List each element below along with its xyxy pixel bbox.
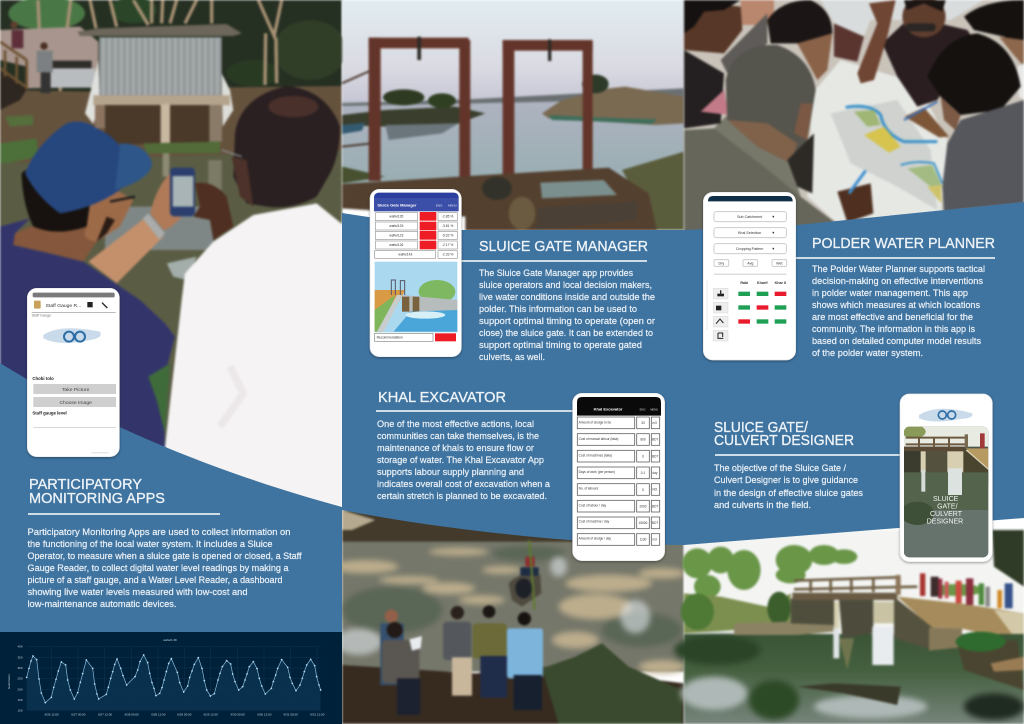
- text: khal excavator description: certain stretch is planned to be excavated.: [377, 491, 547, 502]
- heading: khal excavator: KHAL EXCAVATOR: [378, 390, 506, 406]
- phone: polder water planner: Dry: [718, 261, 724, 265]
- text: sluice gate manager description: support optimal timing to operate (open or: [479, 316, 656, 327]
- text: sluice gate manager description: The Sluice Gate Manager app provides: [479, 268, 633, 279]
- text: polder water planner description: [812, 264, 985, 359]
- phone: khal excavator: day: [652, 471, 658, 475]
- phone: staff gauge reader: Chobi tolo: [32, 376, 54, 381]
- text: sluice gate manager description: support optimal timing to operate gated: [479, 340, 642, 351]
- heading: participatory monitoring apps: PARTICIPATORY: [29, 477, 142, 493]
- phone: polder water planner: Kharif: [757, 281, 768, 285]
- phone: staff gauge reader: Take Picture: [62, 387, 90, 393]
- heading: polder water planner: POLDER WATER PLANNER: [812, 236, 995, 252]
- phone: sluice gate manager: wafw/126: [389, 243, 404, 247]
- phone: khal excavator: Cost of labour / day: [579, 503, 606, 507]
- phone: khal excavator: BDT: [652, 504, 658, 508]
- phone: khal excavator: Amount of sludge / day: [579, 536, 611, 540]
- panel: sluice gate / culvert designer: [714, 420, 901, 511]
- text: polder water planner description: of the polder water system.: [812, 348, 923, 359]
- panel: sluice gate manager: [460, 239, 656, 363]
- text: splash title: GATE/: [937, 503, 958, 510]
- text: polder water planner description: based on detailed computer model results: [812, 336, 981, 347]
- phone: polder water planner: Avg: [747, 261, 753, 265]
- chart: water level dashboard: 300: [18, 666, 23, 670]
- text: participatory monitoring description: Participatory Monitoring Apps are used to collect information on: [28, 527, 290, 538]
- people: [380, 623, 404, 685]
- text: participatory monitoring description: [28, 527, 302, 610]
- phone: sluice gate culvert designer: [900, 394, 992, 562]
- text: khal excavator description: communities can take themselves, is the: [377, 431, 539, 442]
- phone: khal excavator: 0.1: [641, 471, 645, 475]
- text: designer description: Culvert Designer is to give guidance: [714, 475, 858, 486]
- chart: water level dashboard: 6/28 12:00: [151, 713, 166, 717]
- phone: khal excavator: 2000: [639, 504, 647, 508]
- phone: polder water planner: Rabi: [740, 281, 748, 285]
- text: splash title: DESIGNER: [927, 519, 963, 526]
- phone: khal excavator: [573, 393, 665, 561]
- text: sluice gate manager description: close) the sluice gate. It can be extended to: [479, 328, 653, 339]
- text: sluice gate manager description: live water conditions inside and outside the: [479, 292, 655, 303]
- phone: khal excavator: 1130: [640, 538, 647, 542]
- text: polder water planner description: in polder water management. This app: [812, 288, 968, 299]
- photo: two men checking phone by the hut: [0, 0, 347, 533]
- phone: sluice gate manager: MENU: [448, 203, 457, 207]
- text: designer description: in the design of effective sluice gates: [714, 488, 863, 499]
- chart: water level dashboard: 6/29 12:00: [204, 713, 218, 717]
- chart: water level dashboard: 6/27 00:00: [71, 713, 86, 717]
- phone: polder water planner: Cropping Pattern: [736, 247, 763, 251]
- chart: water level dashboard: 150: [18, 698, 23, 702]
- text: splash title: SLUICE: [933, 496, 959, 503]
- phone: polder water planner: ▼: [772, 215, 775, 219]
- phone: sluice gate manager: -2.85 %: [442, 215, 453, 219]
- chart: water level dashboard: 400: [18, 645, 23, 649]
- phone: khal excavator: ENG: [640, 407, 645, 411]
- phone: staff gauge reader: Staff gauge level: [32, 410, 67, 415]
- phone: staff gauge reader: Choose Image: [59, 400, 92, 406]
- phone: khal excavator: Khal Excavator: [594, 406, 623, 411]
- chart: water level dashboard: 250: [18, 677, 23, 681]
- phone: khal excavator: BDT: [652, 454, 658, 458]
- photo: group reading a map at a table: [684, 0, 1024, 233]
- icon: project logo: [43, 328, 101, 343]
- phone: staff gauge reader: Staff Gauge R...: [46, 303, 81, 309]
- phone: staff gauge reader: [27, 288, 119, 457]
- chart: water level dashboard: 6/27 12:00: [98, 713, 112, 717]
- text: khal excavator description: supports labour supply planning and: [377, 467, 524, 478]
- panel: polder water planner: [795, 236, 995, 359]
- text: participatory monitoring description: the functioning of the local water system. It includes a Sluice: [28, 539, 272, 550]
- phone: sluice gate manager: ENG: [436, 203, 443, 207]
- text: designer description: [714, 463, 863, 511]
- phone: khal excavator: 5: [642, 488, 644, 492]
- phone: polder water planner: Khal Selection: [738, 231, 761, 235]
- text: splash title: CULVERT: [930, 511, 963, 518]
- phone: sluice gate manager: Recommendation: [377, 336, 403, 340]
- chart: water level dashboard: 6/26 12:00: [45, 713, 59, 717]
- heading: participatory monitoring apps: MONITORING APPS: [29, 491, 165, 507]
- phone: polder water planner: Khar II: [775, 281, 786, 285]
- text: designer description: and culverts in the field.: [714, 500, 811, 511]
- panel: blue background shapes: [0, 202, 1024, 632]
- text: sluice gate manager description: culverts, as well.: [479, 352, 545, 363]
- icon: project logo: [919, 409, 973, 422]
- text: participatory monitoring description: Operator, to measure when a sluice gate is opened or closed, a Staff: [28, 551, 302, 562]
- photo: bridge on app splash screen: [901, 425, 988, 557]
- text: sluice gate manager description: [479, 268, 656, 363]
- text: khal excavator description: storage of water. The Khal Excavator App: [377, 455, 544, 466]
- phone: khal excavator: Amount of sludge to be: [579, 421, 611, 425]
- phone: khal excavator: m3: [652, 538, 657, 542]
- text: polder water planner description: The Polder Water Planner supports tactical: [812, 264, 985, 275]
- chart: water level dashboard: wafw/1:48: [163, 638, 177, 642]
- phone: khal excavator: Cost of machines (taka): [579, 453, 612, 457]
- photo: sluice gate frames on the river: [342, 0, 684, 231]
- phone: polder water planner: ▼: [772, 231, 775, 235]
- phone: sluice gate manager: wafw/123: [389, 233, 404, 237]
- phone: polder water planner: [703, 192, 796, 360]
- phone: sluice gate manager: -3.81 %: [442, 224, 453, 228]
- chart: water level dashboard: Gate/meter: [7, 674, 11, 689]
- phone: sluice gate manager: wafw/129: [389, 224, 404, 228]
- text: khal excavator description: maintenance of khals to ensure flow or: [377, 443, 535, 454]
- phone: sluice gate manager: [370, 189, 461, 357]
- phone: polder water planner: ▼: [772, 247, 775, 251]
- icons: measure buttons: [713, 288, 728, 341]
- photo: people at the river watching a boat: [332, 510, 685, 724]
- panel: khal excavator: [376, 390, 574, 502]
- photo: concrete bridge with people: [674, 530, 1024, 724]
- phone: polder water planner: Sub Catchment: [737, 215, 762, 219]
- text: participatory monitoring description: Gauge Reader, to collect digital water level readings by making a: [28, 563, 289, 574]
- phone: khal excavator: 15000: [639, 521, 648, 525]
- heading: sluice gate culvert designer: CULVERT DESIGNER: [714, 433, 854, 449]
- text: khal excavator description: [377, 419, 551, 502]
- text: khal excavator description: indicates overall cost of excavation when a: [377, 479, 551, 490]
- phone: khal excavator: Cost of machine / day: [579, 520, 610, 524]
- text: splash title: [927, 496, 963, 526]
- text: sluice gate manager description: sluice operators and local decision makers,: [479, 280, 652, 291]
- chart: water level dashboard: 200: [18, 687, 23, 691]
- chart: water level dashboard: 350: [18, 655, 23, 659]
- phone: khal excavator: BDT: [652, 521, 658, 525]
- phone: sluice gate manager: -2.33 %: [442, 253, 453, 257]
- chart: water level dashboard: 100: [18, 708, 23, 712]
- phone: khal excavator: BDT: [652, 438, 658, 442]
- phone: staff gauge reader: Staff Gauge: [32, 314, 51, 318]
- chart: water level dashboard: 6/31 00:00: [284, 713, 298, 717]
- phone: khal excavator: MENU: [650, 407, 658, 411]
- heading: sluice gate culvert designer: [714, 420, 854, 449]
- phone: khal excavator: 33: [641, 421, 645, 425]
- chart: water level dashboard: 6/28 00:00: [125, 713, 139, 717]
- text: polder water planner description: community. The information in this app is: [812, 324, 975, 335]
- phone: khal excavator: m3: [652, 421, 657, 425]
- phone: sluice gate manager: -5.02 %: [442, 233, 453, 237]
- text: polder water planner description: shows which measures at which locations: [812, 300, 980, 311]
- grid: intervention ratings: [738, 292, 786, 324]
- chart: water level dashboard: 6/30 00:00: [231, 713, 245, 717]
- phone: polder water planner: Wet: [776, 261, 783, 265]
- heading: sluice gate manager: SLUICE GATE MANAGER: [479, 239, 648, 255]
- phone: sluice gate manager: wafw/143: [398, 253, 413, 257]
- text: designer description: The objective of the Sluice Gate /: [714, 463, 846, 474]
- text: participatory monitoring description: showing live water levels measured with low-cost and: [28, 587, 248, 598]
- chart: water level dashboard: 6/29 00:00: [177, 713, 192, 717]
- text: participatory monitoring description: picture of a staff gauge, and a Water Level Reader, a dashboard: [28, 575, 282, 586]
- phone: khal excavator: Cost of manual labour (taka): [579, 437, 618, 441]
- heading: participatory monitoring apps: [29, 477, 165, 507]
- phone: khal excavator: 800: [640, 438, 646, 442]
- phone: sluice gate manager: Sluice Gate Manager: [377, 202, 417, 207]
- text: sluice gate manager description: polder. This information can be used to: [479, 304, 637, 315]
- text: polder water planner description: decision-making on effective interventions: [812, 276, 983, 287]
- phone: khal excavator: NO.: [652, 488, 658, 492]
- illustration: sluice gate scene: [375, 262, 457, 332]
- chart: water level dashboard: [0, 632, 342, 724]
- chart: water level dashboard: 6/31 12:00: [310, 713, 325, 717]
- phone: khal excavator: 0: [642, 454, 644, 458]
- chart: water level dashboard: 6/30 12:00: [257, 713, 272, 717]
- phone: sluice gate manager: -2.17 %: [442, 243, 453, 247]
- text: khal excavator description: One of the most effective actions, local: [377, 419, 534, 430]
- panel: participatory monitoring apps: [28, 477, 302, 610]
- text: participatory monitoring description: low-maintenance automatic devices.: [28, 599, 176, 610]
- phone: khal excavator: No. of labours: [579, 487, 599, 491]
- text: polder water planner description: are most effective and beneficial for the: [812, 312, 973, 323]
- phone: khal excavator: Days of work (per person): [579, 470, 615, 474]
- phone: sluice gate manager: wafw/135: [389, 215, 404, 219]
- heading: sluice gate culvert designer: SLUICE GATE/: [714, 420, 809, 436]
